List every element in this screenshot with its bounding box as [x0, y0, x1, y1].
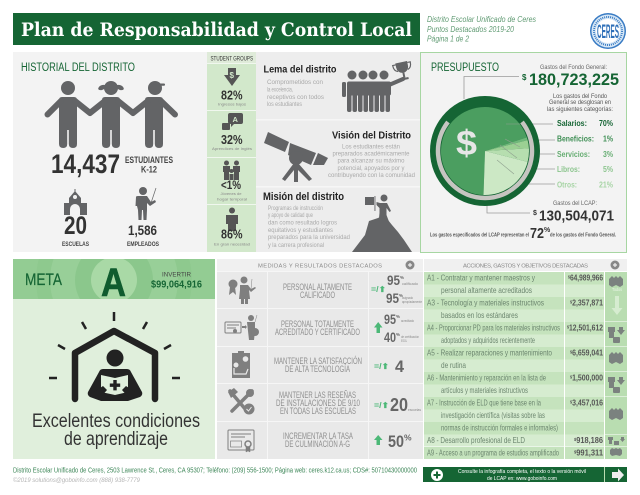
legend: spending categories: Otros: [557, 180, 577, 190]
text: lema: receptivos con todos [267, 94, 325, 101]
total LCAP: $ [533, 210, 537, 217]
action A4: 12,501,612 [569, 322, 603, 332]
text: mision: equitativos y estudiantes [268, 227, 334, 234]
action A4 [427, 322, 603, 345]
goal title: de aprendizaje [64, 428, 168, 450]
action A5: $ [570, 350, 572, 354]
icon: all students with arrow: Todos [612, 287, 623, 292]
row: tasa de culminacion A-G: DE CULMINACIÓN A-G [285, 439, 350, 449]
stat: english learners: A [232, 115, 238, 124]
action A5 [427, 348, 603, 370]
row: personal acreditado y certificado: de certificación [401, 335, 419, 339]
footer: contact: ©2019 solutions@goboinfo.com (888) 938-7779 [13, 476, 140, 484]
action A3: A3 - Tecnología y materiales instructivos [427, 298, 544, 308]
stat: schools: ESCUELAS [62, 242, 89, 248]
row: satisfaccion de tecnologia: =/⬆ [374, 362, 389, 371]
row: personal acreditado y certificado: acreditado [401, 319, 414, 323]
total LCAP [533, 200, 614, 224]
icon: student groups A8 [608, 437, 625, 445]
row: satisfaccion de tecnologia [232, 351, 405, 378]
row: personal altamente calificado: PERSONAL ALTAMENTE [283, 282, 352, 292]
action A6: 1,500,000 [572, 372, 603, 382]
icon: telescope [264, 132, 328, 182]
row: personal acreditado y certificado: % [396, 314, 400, 319]
row: satisfaccion de tecnologia: DE ALTA TECNOLOGÍA [285, 364, 350, 374]
action A4: $ [567, 324, 569, 330]
action A6: artículos y materiales instructivos [441, 386, 528, 395]
panel: lema, vision, mision [256, 52, 420, 252]
title banner: Plan de Responsabilidad y Control Local [21, 19, 412, 41]
legend: spending categories: 21% [599, 180, 613, 190]
stat: english learners: 32% [221, 133, 242, 147]
icon: plus badge [406, 260, 414, 270]
district subtitle [427, 14, 537, 44]
district subtitle: Página 1 de 2 [427, 34, 469, 44]
action A6 [427, 372, 603, 395]
legend: spending categories: 3% [603, 150, 613, 159]
action A3: basados en los estándares [441, 311, 518, 320]
row: tasa de culminacion A-G: 50 [388, 432, 404, 451]
action A7: normas de instrucción formales e informales) [441, 424, 558, 432]
stat: students: ESTUDIANTES [125, 155, 173, 165]
row: resenas de instalaciones: 20 [390, 395, 408, 415]
total general fund: Gastos del Fondo General: [540, 64, 607, 71]
row: personal altamente calificado: =/⬆ [371, 285, 386, 294]
stat: low income: $ [230, 71, 234, 80]
footer: contact [13, 466, 417, 484]
row: resenas de instalaciones: MANTENER LAS RESEÑAS [279, 390, 356, 400]
action A7: A7 - Instrucción de ELD que tiene base en la [427, 398, 541, 408]
text: lema: Comprometidos con [267, 79, 323, 86]
total general fund [522, 64, 619, 89]
stat: foster youth [217, 160, 247, 202]
action A1: A1 - Contratar y mantener maestros y [427, 274, 536, 282]
icon: all students A9 [610, 448, 622, 456]
action A7: 3,457,016 [572, 398, 603, 408]
goal banner: $99,064,916 [151, 280, 202, 290]
row: resenas de instalaciones: escuelas [408, 408, 421, 412]
panel: acciones, gastos y objetivos [424, 259, 627, 459]
text: vision [328, 144, 415, 179]
icon: plus [431, 469, 443, 481]
heading: vision: Visión del Distrito [332, 130, 411, 142]
icon: all students A5 [609, 352, 623, 364]
stat: foster youth: hogar temporal [217, 196, 247, 202]
stat: low income [218, 68, 246, 106]
action A1: personal altamente acreditados [441, 286, 532, 295]
row: personal altamente calificado: calificado [402, 282, 418, 286]
action A1: $ [568, 274, 570, 280]
row: tasa de culminacion A-G [228, 430, 412, 452]
row: satisfaccion de tecnologia: MANTENER LA SATISFACCIÓN [274, 356, 362, 366]
total LCAP: 130,504,071 [539, 208, 614, 224]
row: resenas de instalaciones [228, 388, 421, 416]
text: vision: potencial, apoyados por y [338, 165, 405, 172]
row: tasa de culminacion A-G: INCREMENTAR LA TASA [283, 431, 353, 441]
heading: lema: Lema del distrito [264, 64, 336, 76]
legend: spending categories: 70% [599, 119, 613, 128]
heading: acciones: ACCIONES, GASTOS Y OBJETIVOS DESTACADAS [463, 264, 588, 270]
action A9: $ [574, 450, 577, 454]
stat: students [51, 149, 173, 179]
heading: medidas: MEDIDAS Y RESULTADOS DESTACADOS [258, 264, 382, 270]
action A6: A6 - Mantenimiento y reparación en la lista de [427, 374, 546, 382]
row: personal acreditado y certificado [225, 311, 419, 345]
icon: three children holding hands [48, 81, 175, 148]
row: personal altamente calificado: % [399, 293, 403, 298]
panel: historial del distrito [13, 52, 207, 252]
row: resenas de instalaciones: EN TODAS LAS ESCUELAS [280, 406, 356, 416]
action A5: A5 - Realizar reparaciones y mantenimiento [427, 348, 552, 358]
leader lines [464, 76, 555, 213]
stat: foster youth: Jóvenes de [220, 191, 242, 196]
action A6: $ [570, 374, 572, 380]
callout: full infographic link [423, 467, 627, 482]
text: mision: dan como resultado logros [268, 220, 338, 226]
icon: teacher [136, 187, 156, 220]
legend: spending categories [557, 119, 613, 190]
row: resenas de instalaciones: =/⬆ [374, 401, 389, 410]
text: LCAP share: % [544, 227, 551, 234]
text: lema: los estudiantes [267, 101, 302, 108]
text: breakdown intro: las siguientes categorías: [547, 106, 613, 113]
stat: high need: 86% [221, 228, 242, 242]
text: lema: la excelencia, [267, 86, 293, 94]
stat: low income: Ingresos bajos [218, 102, 246, 106]
text: LCAP share: Los gastos especificados del LCAP representan el [430, 232, 529, 238]
action A8 [427, 435, 603, 445]
total general fund: $ [522, 73, 527, 82]
district subtitle: Puntos Destacados 2019-20 [427, 24, 514, 34]
goal banner: META [25, 271, 62, 289]
stat: employees: 1,586 [128, 222, 157, 238]
row: personal altamente calificado: apropiadamente [402, 300, 422, 304]
action A9: 991,311 [576, 448, 603, 458]
heading: student groups [207, 52, 256, 63]
stat: schools [62, 212, 89, 248]
row: personal altamente calificado: 95 [387, 272, 400, 288]
district subtitle: Distrito Escolar Unificado de Ceres [427, 14, 537, 24]
panel: student groups [207, 52, 256, 252]
icon: student groups A6 [608, 377, 625, 393]
text: mision: y la carrera profesional [268, 242, 324, 249]
goal banner: A [101, 261, 126, 305]
panel: meta A [13, 202, 215, 459]
legend: spending categories: Beneficios: [557, 134, 594, 144]
stat: students: K-12 [141, 164, 157, 174]
goal banner: INVERTIR [162, 272, 191, 278]
row: satisfaccion de tecnologia: 4 [395, 357, 405, 376]
action A7 [427, 398, 603, 432]
icon: people raising trophy [342, 60, 414, 112]
row: personal acreditado y certificado: 40 [384, 329, 396, 345]
text: breakdown intro: Los gastos del Fondo [553, 93, 608, 100]
action A3 [427, 298, 603, 320]
pie chart: general fund spending: $ [456, 124, 477, 163]
logo: Ceres [590, 13, 626, 49]
text: mision: Programas de instrucción [268, 205, 323, 212]
heading: student groups: STUDENT GROUPS [210, 56, 253, 62]
text: LCAP share [430, 225, 616, 242]
legend: spending categories: 1% [603, 134, 613, 144]
action A1: 64,989,966 [570, 272, 603, 282]
stat: employees: EMPLEADOS [127, 242, 159, 248]
row: personal acreditado y certificado: % [396, 332, 400, 337]
legend: spending categories: 5% [603, 165, 613, 174]
text: vision: preparados académicamente [332, 150, 410, 158]
action A5: de rutina [441, 361, 466, 370]
row: personal altamente calificado: % [400, 275, 404, 280]
legend: spending categories: Libros: [557, 165, 580, 174]
text: vision: Los estudiantes están [342, 144, 400, 150]
total LCAP: Gastos del LCAP: [553, 200, 597, 207]
action A8: 918,186 [576, 435, 603, 445]
icon: plus badge [610, 260, 620, 270]
icon: arrow [612, 468, 624, 482]
action A5: 6,659,041 [572, 348, 603, 358]
text: link [458, 469, 586, 482]
action A8: $ [574, 437, 577, 442]
action A3: 2,357,871 [572, 298, 603, 308]
text: breakdown intro: General se desglosan en [549, 99, 612, 106]
goal title [32, 410, 200, 450]
stat: employees [127, 222, 159, 248]
text: link: Consulte la infografía completa, el texto o la versión móvil [458, 469, 586, 475]
footer: contact: Distrito Escolar Unificado de Ceres, 2503 Lawrence St., Ceres, CA 95307; Teléfono: (209) 556-1500; Página web: ceres.k12.ca.us; CDS#: 50710430000000 [13, 466, 417, 474]
stat: high need: En gran necesidad [214, 242, 250, 246]
stat: low income: 82% [221, 88, 242, 102]
stat: students: 14,437 [51, 149, 120, 179]
action A4: adoptados y adquiridos recientemente [441, 336, 535, 345]
action A9: A9 - Acceso a un programa de estudios amplificado [427, 448, 559, 458]
action A7: investigación científica (visitas sobre las [441, 411, 545, 420]
legend: spending categories: Salarios: [557, 119, 587, 128]
row: personal altamente calificado: 95 [386, 290, 399, 306]
row: personal altamente calificado: CALIFICADO [300, 290, 335, 300]
title banner [13, 13, 420, 45]
action A4: A4 - Proporcionar PD para los materiales instructivos [427, 324, 560, 332]
action A3: $ [570, 300, 572, 304]
icon: student groups A4 [608, 327, 625, 343]
action A1 [427, 272, 603, 295]
icon: school [64, 189, 87, 215]
icon: reader in house with rays [49, 312, 180, 401]
row: personal altamente calificado [228, 272, 422, 306]
text: mision: preparados para la universidad [268, 234, 350, 241]
heading: presupuesto: PRESUPUESTO [431, 60, 499, 74]
row: personal altamente calificado: asignado [402, 296, 413, 300]
heading: historial: HISTORIAL DEL DISTRITO [21, 62, 135, 74]
panel: presupuesto [420, 52, 626, 252]
text: mision: y apoyo de calidad que [268, 212, 313, 219]
stat: english learners: Aprendices de Inglés [212, 146, 252, 151]
row: resenas de instalaciones: DE INSTALACIONES DE 9/10 [276, 398, 360, 408]
text: vision: contribuyendo con la comunidad [328, 172, 415, 179]
action A7: $ [570, 400, 572, 404]
heading: mision: Misión del distrito [263, 191, 344, 203]
action A8: A8 - Desarrollo profesional de ELD [427, 436, 525, 445]
stat: foster youth: <1% [221, 178, 241, 192]
row: personal acreditado y certificado: 95 [384, 311, 396, 327]
text: lema [267, 79, 325, 108]
panel: medidas y resultados [217, 259, 423, 459]
text: mision [268, 205, 350, 249]
row: personal acreditado y certificado: ACREDITADO Y CERTIFICADO [275, 327, 360, 337]
stat: schools: 20 [64, 212, 87, 240]
total general fund: 180,723,225 [529, 71, 619, 89]
icon: climber on mountain [352, 194, 412, 252]
goal banner [13, 202, 215, 358]
text: link: de LCAP en: www.goboinfo.com [487, 476, 557, 482]
row: personal acreditado y certificado: PERSONAL TOTALMENTE [281, 319, 354, 329]
legend: spending categories: Servicios: [557, 150, 590, 159]
row: tasa de culminacion A-G: % [404, 432, 412, 442]
icon: all students with arrow [609, 276, 623, 315]
stat: english learners [212, 113, 252, 151]
text: breakdown intro [547, 93, 613, 113]
icon: all students A7 [609, 408, 623, 420]
stat: high need [214, 208, 250, 246]
goal title: Excelentes condiciones [32, 410, 200, 432]
pie chart: general fund spending [430, 96, 540, 206]
text: LCAP share: 72 [530, 225, 544, 242]
text: LCAP share: de los gastos del Fondo General. [550, 232, 616, 238]
row: personal acreditado y certificado: ESOL [401, 339, 407, 343]
text: vision: para alcanzar su máximo [338, 158, 405, 164]
